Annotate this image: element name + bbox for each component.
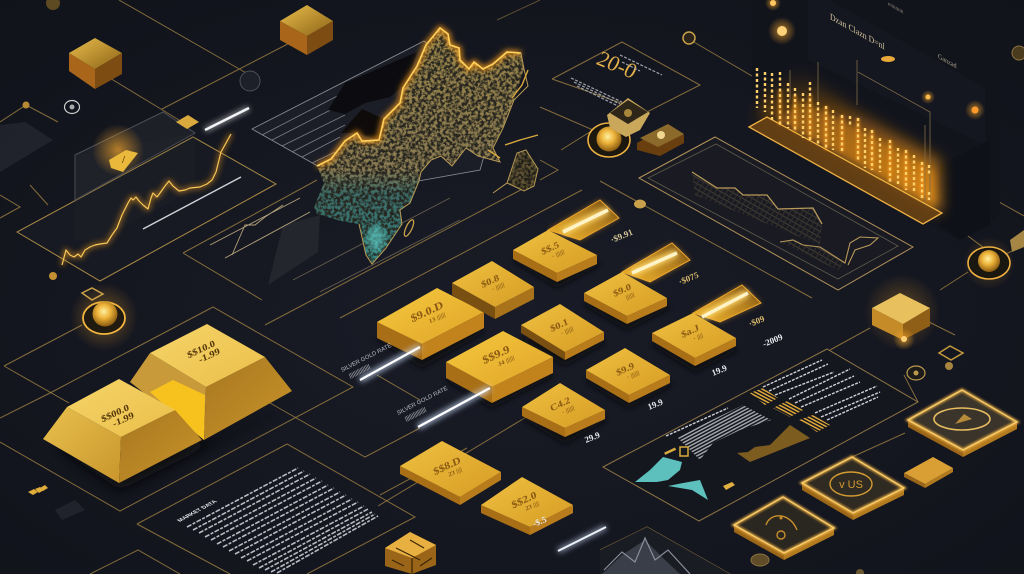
mesh area [692,172,822,245]
price tile: F: $0.1 [549,317,569,335]
icon: glowing gold chip [92,124,144,176]
value labels next to tiles [340,227,785,529]
dark cavity shapes [328,52,417,114]
price tile: F: · |||||| [560,326,574,337]
icon: gold striped chip [904,457,953,488]
text block panel [176,468,378,573]
gold mini area chart [737,425,810,462]
price tile: J: 23 |||| [448,466,463,479]
white text rows [666,360,880,436]
price tile: A large [377,288,484,360]
small node icons top left [22,0,260,300]
small white captions [571,55,662,106]
panel: small number card top right [571,45,662,106]
price tile: J: $$8.D [432,455,462,478]
orange glow area [757,70,940,213]
value labels next to tiles: 19.9 [710,362,729,378]
value labels next to tiles: ·$09 [747,313,766,329]
price tile: K [481,477,573,535]
white streak top [205,108,249,130]
heading: MARKET DATA [176,500,220,523]
price tile: G large [446,331,553,403]
trend lines [692,172,822,224]
value labels next to tiles: SILVER GOLD RATE [340,343,393,374]
panel: line chart net [639,137,913,290]
front gold bar: $$00.0 [100,403,130,425]
icon: gold cube top [280,5,333,55]
icon tile: swirl [734,497,834,560]
value labels next to tiles: 19.9 [646,396,665,412]
price tile: I: · |||||| [561,405,575,416]
panel: left price line chart [17,112,276,281]
land mass: Eurasia and Africa [314,28,524,264]
Australia [493,150,538,193]
light column glow [780,90,922,198]
east and south coast [359,53,528,264]
chart frame [17,137,276,281]
price tile: B [452,261,534,319]
price tile: I: C4.2 [549,395,572,414]
price tile: I [522,383,605,437]
value labels next to tiles: ·$9.91 [609,227,634,245]
price tile: H: $9.9 [615,361,635,379]
price tile: G large: $$9.9 [481,342,511,367]
white trend line [143,177,241,229]
glowing northern border [317,28,521,166]
shadows [377,240,738,444]
icon tile: play button [908,390,1017,457]
gold hexagon box [607,98,650,137]
grid lines [790,60,930,205]
icon: gold cube left [69,38,122,89]
base plate [749,117,942,224]
light columns [757,68,929,200]
islands [488,70,538,158]
price tile: J [400,441,501,505]
glass card [75,112,195,200]
price tile: F [521,304,604,360]
price tile: K: $$2.0 [510,489,538,511]
dark open box [637,125,684,156]
node at upper right [683,32,695,44]
small icons right [856,346,963,574]
front gold bar [43,379,202,483]
teal world map [635,457,708,500]
price tile: G large: J4 |||||| [497,355,515,368]
panel: data report bottom right [603,349,918,521]
value labels next to tiles: 29.9 [583,429,602,445]
price tile: B: · |||||| [491,282,505,293]
price tile: A large: 13 |||||| [428,312,446,325]
icon: glowing gold chip: / [121,154,126,166]
small node bottom [751,554,769,566]
panel: glowing bar tower [749,0,1024,240]
text lines [187,468,378,573]
price tile: B: $0.8 [480,273,500,291]
icon: node circle above tiles [634,200,646,208]
plate group: gold price tiles [377,200,761,535]
price tile with glow bar: D: $9.0 [612,282,632,300]
icon: glowing gold cube right [864,274,940,350]
gold numerals: 20-0 [594,45,639,84]
value labels next to tiles: SILVER GOLD RATE [396,386,449,417]
price tile with glow bar: E: · |||| [693,332,704,343]
value labels next to tiles: ||||||||||||||| [404,407,427,423]
dark glass wall [752,0,1000,240]
gold hatched tags [750,388,778,405]
panel: gold ingot bars [43,324,300,490]
icon: gold wire cube bottom [385,532,436,574]
panel: glowing bar tower: ennnnn [888,1,903,16]
back gold bar: $$10.0 [186,339,216,361]
price tile with glow bar: C: $$.5 [540,240,560,258]
value labels next to tiles: ||||||||||||||| [348,364,371,380]
back gold bar: -1.99 [198,347,221,366]
mini gold diamonds [28,485,48,495]
value labels next to tiles: -$.5 [531,514,548,529]
tower title text: Dzan Clazn D=nl [830,11,885,52]
small faint chart motifs in background [0,122,85,520]
icon tile: US coin [802,457,904,520]
cyan highlight southern Africa [367,225,385,251]
white light streaks [360,347,606,551]
icon: glowing orb left [70,283,138,351]
price tile with glow bar: D [584,243,690,324]
price tile with glow bar: E: $a.J [680,323,700,341]
world map: dark grid base [252,28,538,264]
front gold bar: -1.99 [112,411,135,430]
value labels next to tiles: -2009 [761,331,785,349]
price tile: H [586,348,670,403]
price tile: H: · |||||| [626,370,640,381]
price tile with glow bar: C: · |||||| [551,249,565,260]
price tile with glow bar: C [513,200,619,282]
small gold marks [664,448,676,455]
Madagascar [402,219,416,237]
value labels next to tiles: ·$075 [677,269,701,287]
panel: glowing bar tower: Ganzad [938,52,957,71]
shadow [55,400,300,490]
glowing light dots [768,17,796,45]
price tile with glow bar: E [652,285,761,366]
panel: bottom mini line chart [600,527,730,574]
gold price line [62,134,231,265]
back gold bar [130,324,292,440]
icon tile: US coin: v US [839,479,863,491]
grey hatched area chart [677,405,771,460]
icon: right orb and node [963,230,1024,289]
map foot mini chart [210,198,460,292]
price tile: K: 23 |||| [525,500,540,513]
price tile: A large: $9.0.D [409,298,445,325]
icon: orb and box cluster [588,32,695,157]
price tile with glow bar: D: |||||| [625,291,635,301]
